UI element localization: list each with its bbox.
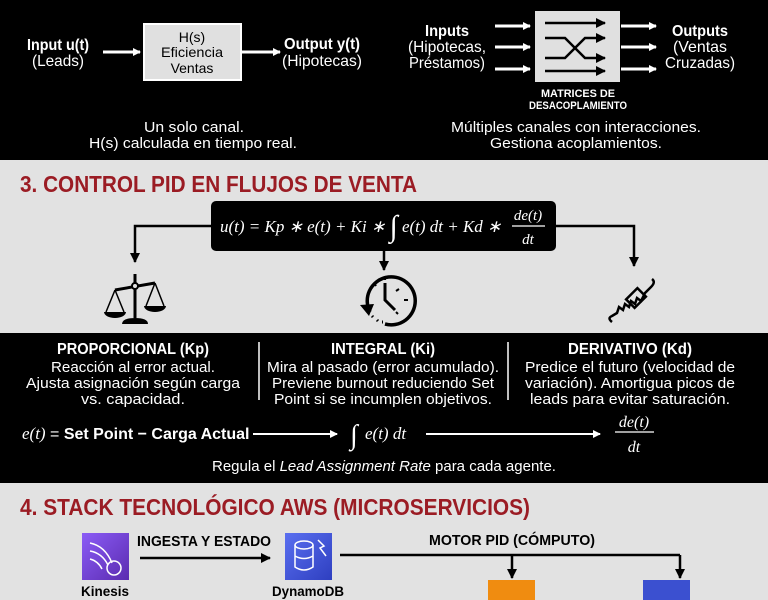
heading 3: 3. CONTROL PID EN FLUJOS DE VENTA [20,171,417,197]
column: integral: Point si se incumplen objetivos. [274,391,492,408]
SISO diagram: (Leads) [32,53,84,70]
SISO diagram: Ventas [171,60,213,76]
captions: H(s) calculada en tiempo real. [89,135,297,152]
column: proporcional: vs. capacidad. [81,391,185,408]
caption: Regula el Lead Assignment Rate para cada agente. [212,458,556,475]
icon: Kinesis [82,533,129,580]
column: proporcional: PROPORCIONAL (Kp) [57,341,209,358]
MIMO diagram: Cruzadas) [665,55,735,72]
SISO diagram: Input u(t) [27,37,89,54]
error formula row: ∫ [348,420,360,452]
panel: section 2 top (black) [0,0,768,160]
formula box: u(t) = Kp ∗ e(t) + Ki ∗ [220,217,385,236]
formula box: ∫ [387,210,399,245]
MIMO diagram [408,11,735,112]
arrow: ingesta [137,533,271,558]
column: derivativo: variación). Amortigua picos de [525,375,735,392]
icon: clock [360,276,415,325]
panel: section 4 AWS: DynamoDB [272,583,344,599]
SISO diagram: (Hipotecas) [282,53,362,70]
arrow: ingesta: INGESTA Y ESTADO [137,533,271,550]
captions: Gestiona acoplamientos. [490,135,662,152]
column: derivativo [525,341,735,408]
column: proporcional [26,341,241,408]
error formula row: dt [628,439,641,456]
column: derivativo: leads para evitar saturación. [530,391,730,408]
SISO diagram: Output y(t) [284,36,360,53]
SISO diagram: H(s) [179,29,205,45]
MIMO diagram: DESACOPLAMIENTO [529,100,627,112]
column: proporcional: Ajusta asignación según carga [26,375,241,392]
error formula row: e(t) dt [365,424,407,443]
panel: section 3 PID [0,160,768,333]
heading 4: 4. STACK TECNOLÓGICO AWS (MICROSERVICIOS) [20,493,530,520]
icon: scale [104,274,166,324]
MIMO diagram: Inputs [425,23,469,40]
MIMO diagram: (Hipotecas, [408,39,486,56]
column: integral [267,341,499,408]
MIMO diagram: MATRICES DE [541,88,615,100]
SISO diagram: Eficiencia [161,44,223,60]
connector lines [135,226,634,270]
column: integral: INTEGRAL (Ki) [331,341,435,358]
formula box: dt [522,232,535,248]
column: integral: Previene burnout reduciendo Set [272,375,495,392]
icon: Lambda [488,580,535,600]
SISO diagram [27,24,362,80]
error formula row: de(t) [619,414,649,431]
column: proporcional: Reacción al error actual. [51,359,215,376]
panel: section 4 AWS: Kinesis [81,583,129,599]
column: derivativo: Predice el futuro (velocidad de [525,359,735,376]
captions: Múltiples canales con interacciones. [451,119,701,136]
MIMO diagram: Préstamos) [409,55,485,72]
column: derivativo: DERIVATIVO (Kd) [568,341,692,358]
error formula row: e(t) = Set Point − Carga Actual [22,424,250,443]
motor PID branches: MOTOR PID (CÓMPUTO) [429,531,595,549]
formula box: e(t) dt + Kd ∗ [398,217,501,236]
column: integral: Mira al pasado (error acumulado). [267,359,499,376]
error formula row [22,414,654,456]
icon: DynamoDB [285,533,332,580]
captions: Un solo canal. [144,119,244,136]
icon: spring damper [610,279,654,322]
MIMO diagram: Outputs [672,23,728,40]
captions [89,119,701,152]
panel: PID terms (black) [0,333,768,483]
formula box: de(t) [514,208,542,224]
MIMO diagram: (Ventas [673,39,727,56]
icon: Step Functions [643,580,690,600]
panel: section 4 AWS [0,483,768,600]
formula box [211,201,556,251]
